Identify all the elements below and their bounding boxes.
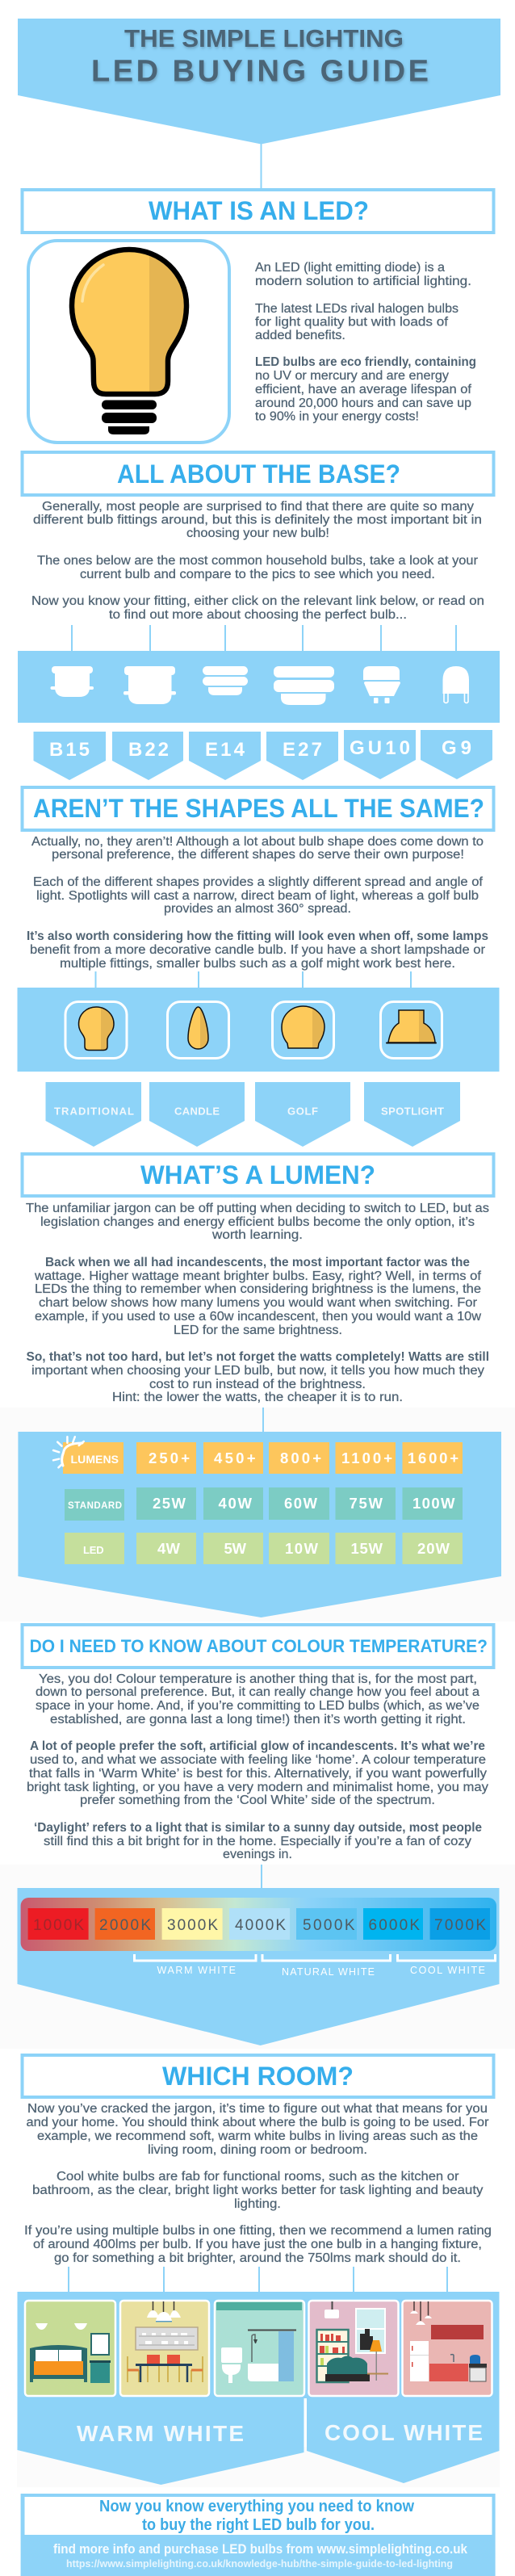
text block: lumens: wattage. Higher wattage meant brighter bulbs. Easy, right? Well, in terms of [34,1269,482,1283]
text block: colour temperature: used to, and what we associate with feeling like ‘home’. A colour temperature [30,1753,486,1767]
text block: which room: lighting. [234,2197,281,2211]
heading: colour temperature: DO I NEED TO KNOW ABOUT COLOUR TEMPERATURE? [30,1636,488,1656]
icon: golf bulb [282,1006,324,1048]
heading: all about the base [23,452,494,495]
text block: shapes: Actually, no, they aren’t! Although a lot about bulb shape does come down to [31,835,484,849]
scale swatches: 4000K [235,1917,286,1934]
text block: lumens: important when choosing your LED bulb, but now, it tells you how much they [31,1364,484,1378]
text block: lumens: So, that’s not too hard, but let’s not forget the watts completely! Watts are still [26,1350,489,1364]
row: standard [65,1487,463,1521]
text block: colour temperature: prefer something from the ‘Cool White’ side of the spectrum. [80,1794,435,1807]
heading: what's a lumen: WHAT’S A LUMEN? [140,1160,375,1189]
row: LED: LED [83,1544,104,1556]
text block: colour temperature [27,1672,488,1861]
text block: colour temperature: evenings in. [223,1848,292,1861]
connector arrow line [260,144,262,189]
text block: lumens: cost to run instead of the brightness. [149,1378,366,1391]
text block: LED intro: efficient, have an average lifespan of [255,383,472,396]
brackets and white ranges: NATURAL WHITE [282,1966,375,1978]
text block: lumens: example, if you used to use a 60w incandescent, then you would want a 10w [35,1310,482,1324]
text block: lumens: worth learning. [211,1228,303,1242]
footer links [53,2541,467,2570]
text block: shapes: light. Spotlights will cast a narrow, direct beam of light, whereas a golf bulb [36,889,479,903]
icon: E14 base [203,666,248,695]
row: lumens: 800+ [280,1450,321,1466]
text block: LED intro: The latest LEDs rival halogen bulbs [255,302,458,316]
icon: B15 base [50,666,94,697]
row: standard: 60W [284,1495,318,1512]
text block: colour temperature: space in your home. And, if you’re committing to LED bulbs (which, as we’ve [36,1699,479,1713]
room: living room [308,2301,399,2396]
text block: shapes: personal preference, the different shapes do serve their own purpose! [52,848,464,862]
row: standard: 100W [412,1495,455,1512]
header banner [18,19,500,144]
text block: LED intro: around 20,000 hours and can save up [255,396,471,410]
icon panel: light bulb [28,241,229,443]
labels: bulb shape tags [45,1082,460,1147]
icon: G9 base [442,666,469,703]
text block: colour temperature: ‘Daylight’ refers to a light that is similar to a sunny day outside, most people [34,1821,482,1835]
closing message: Now you know everything you need to know [99,2498,414,2515]
text block: shapes: It’s also worth considering how the fitting will look even when off, some lamps [27,929,488,943]
text block: which room: Cool white bulbs are fab for functional rooms, such as the kitchen or [57,2170,458,2184]
text block: lumens: Hint: the lower the watts, the cheaper it is to run. [112,1391,403,1404]
text block: lumens [26,1202,489,1404]
footer call to action [21,2494,496,2576]
text block: which room: Now you’ve cracked the jargon, it’s time to figure out what that means for you [27,2102,488,2116]
icon: E27 base [274,666,334,705]
row: LED: 4W [157,1540,181,1557]
row: lumens [53,1437,463,1474]
text block: which room: If you’re using multiple bulbs in one fitting, then we recommend a lumen rating [24,2224,492,2238]
warm white banner [18,2292,305,2485]
text block: base fittings: to find out more about choosing the perfect bulb... [109,608,407,622]
text block: LED intro: to 90% in your energy costs! [255,410,419,423]
row: LED: 20W [417,1540,450,1557]
text block: colour temperature: down to personal preference. But, it can really change how you feel about a [36,1685,479,1699]
text block: LED intro: added benefits. [255,329,345,342]
scale swatches: 1000K [33,1917,84,1934]
row: lumens: LUMENS [71,1453,119,1466]
room: bedroom [25,2301,115,2396]
scale swatches [28,1908,490,1940]
heading: what is an LED: WHAT IS AN LED? [149,196,369,225]
title: LED BUYING GUIDE [91,55,429,89]
text block: base fittings: Now you know your fitting, either click on the relevant link below, or read on [31,594,484,608]
title [91,24,429,89]
row: LED [65,1533,463,1564]
scale swatches: 3000K [167,1917,218,1934]
text block: shapes [27,835,488,971]
labels: bulb base tags: B22 [128,739,169,761]
text block: LED intro: no UV or mercury and are energy [255,369,449,383]
scale swatches: 6000K [368,1917,420,1934]
text block: shapes: multiple fittings, smaller bulbs such as a golf might work best here. [60,957,455,971]
text block: which room [24,2102,492,2265]
room: bathroom [215,2301,304,2396]
row: standard: STANDARD [68,1501,122,1511]
text block: LED intro: modern solution to artificial lighting. [255,275,471,288]
panel: bulb bases [18,625,500,723]
icon: sun [53,1437,84,1467]
scale swatches: 2000K [99,1917,151,1934]
row: LED: 5W [224,1540,247,1557]
text block: LED intro [255,261,476,423]
text block: colour temperature: A lot of people prefer the soft, artificial glow of incandescents. It’s what we’re [30,1739,485,1753]
scale swatches: 5000K [303,1917,355,1934]
text block: base fittings: different bulb fittings around, but this is definitely the most important bit in [33,514,482,527]
panel: rooms [18,2267,499,2485]
brackets and white ranges: WARM WHITE [157,1965,236,1976]
text block: lumens: The unfamiliar jargon can be off putting when deciding to switch to LED, but as [26,1202,489,1215]
row: lumens: 1600+ [408,1450,458,1466]
heading: aren't the shapes all the same [23,787,494,830]
labels: bulb base tags: E27 [283,739,322,761]
text block: colour temperature: bright task lighting, or you have a very modern and minimalist home, you may [27,1781,488,1794]
scale swatches: 7000K [434,1917,486,1934]
row: LED: 15W [350,1540,383,1557]
footer links: https://www.simplelighting.co.uk/knowledge-hub/the-simple-guide-to-led-lighting [66,2557,453,2570]
text block: base fittings: choosing your new bulb! [186,527,329,540]
text block: which room: go for something a bit brighter, around the 750lms mark should do it. [54,2251,461,2265]
labels: bulb shape tags: GOLF [287,1105,318,1118]
brackets and white ranges: COOL WHITE [410,1965,485,1976]
text block: shapes: provides an almost 360° spread. [164,902,351,916]
room: dining room [120,2301,209,2396]
label: cool white: COOL WHITE [324,2420,483,2445]
text block: shapes: Each of the different shapes provides a slightly different spread and angle of [33,875,484,889]
text block: lumens: LED for the same brightness. [174,1324,342,1337]
text block: colour temperature: that falls in ‘Warm White’ is best for this. Alternatively, if you want powerfully [29,1767,487,1781]
text block: which room: and your home. You should think about where the bulb is going to be used. For [26,2116,489,2129]
text block: lumens: LEDs the thing to remember when considering brightness is the lumens, the [35,1282,481,1296]
heading: which room [23,2055,494,2097]
row: lumens: 450+ [214,1450,256,1466]
text block: which room: living room, dining room or bedroom. [148,2143,367,2157]
row: standard: 40W [218,1495,253,1512]
brackets and white ranges [134,1954,496,1978]
footer links: find more info and purchase LED bulbs from www.simplelighting.co.uk [53,2541,467,2557]
row: LED: 10W [285,1540,319,1557]
icon: B22 base [124,666,176,704]
cool white banner [305,2292,499,2483]
icon: traditional bulb [79,1007,114,1050]
text block: base fittings: The ones below are the most common household bulbs, take a look at your [37,554,478,568]
text block: LED intro: for light quality but with loads of [255,315,449,329]
icon: spotlight bulb [386,1010,437,1043]
labels: bulb shape tags: CANDLE [174,1105,220,1118]
text block: shapes: benefit from a more decorative candle bulb. If you have a short lampshade or [30,943,485,957]
panel: colour temperature scale [18,1865,499,2045]
text block: lumens: chart below shows how many lumens you would want when switching. For [39,1296,477,1310]
text block: lumens: legislation changes and energy efficient bulbs become the only option, it’s [40,1215,475,1229]
text block: base fittings: current bulb and compare to the pics to see which you need. [80,568,435,581]
text block: LED intro: LED bulbs are eco friendly, containing [255,355,476,369]
heading: colour temperature [23,1625,494,1668]
heading: what is an LED [23,190,494,233]
labels: bulb base tags: B15 [49,739,90,761]
text block: base fittings [31,500,484,622]
labels: bulb shape tags: TRADITIONAL [54,1105,134,1118]
closing message: to buy the right LED bulb for you. [142,2516,375,2534]
panel: bulb shapes [18,971,499,1072]
labels: bulb base tags: G9 [442,737,471,759]
row: standard: 25W [153,1495,186,1512]
panel: lumens chart [18,1408,501,1617]
text block: colour temperature: Yes, you do! Colour temperature is another thing that is, for the most part, [39,1672,477,1686]
icon: GU10 base [363,666,400,703]
room: kitchen [402,2301,492,2396]
heading: all about the base: ALL ABOUT THE BASE? [117,459,400,489]
row: standard: 75W [349,1495,383,1512]
row: lumens: 1100+ [341,1450,392,1466]
text block: which room: example, we recommend soft, warm white bulbs in living areas such as the [37,2129,478,2143]
labels: bulb base tags: E14 [205,739,245,761]
heading: what's a lumen [23,1154,494,1196]
labels: bulb base tags: GU10 [350,737,410,759]
icon: candle bulb [188,1007,208,1049]
labels: bulb shape tags: SPOTLIGHT [381,1105,444,1118]
text block: lumens: Back when we all had incandescents, the most important factor was the [45,1256,470,1269]
label: warm white: WARM WHITE [77,2421,244,2446]
text block: LED intro: An LED (light emitting diode) is a [255,261,445,275]
text block: which room: bathroom, as the clear, bright light works better for task lighting and beauty [32,2184,484,2197]
row: lumens: 250+ [149,1450,190,1466]
heading: aren't the shapes all the same: AREN’T THE SHAPES ALL THE SAME? [33,794,484,823]
heading: which room: WHICH ROOM? [162,2062,354,2091]
text block: base fittings: Generally, most people are surprised to find that there are quite so many [42,500,474,514]
text block: colour temperature: still find this a bit bright for in the home. Especially if you’re a fan of cozy [44,1835,471,1848]
text block: colour temperature: established, are gonna last a long time!) then it’s worth getting it right. [50,1713,466,1726]
closing message [99,2498,414,2534]
title: THE SIMPLE LIGHTING [124,24,404,52]
text block: which room: of around 400lms per bulb. If you have just the one bulb in a hanging fixture, [33,2238,482,2251]
labels: bulb base tags [34,730,492,780]
